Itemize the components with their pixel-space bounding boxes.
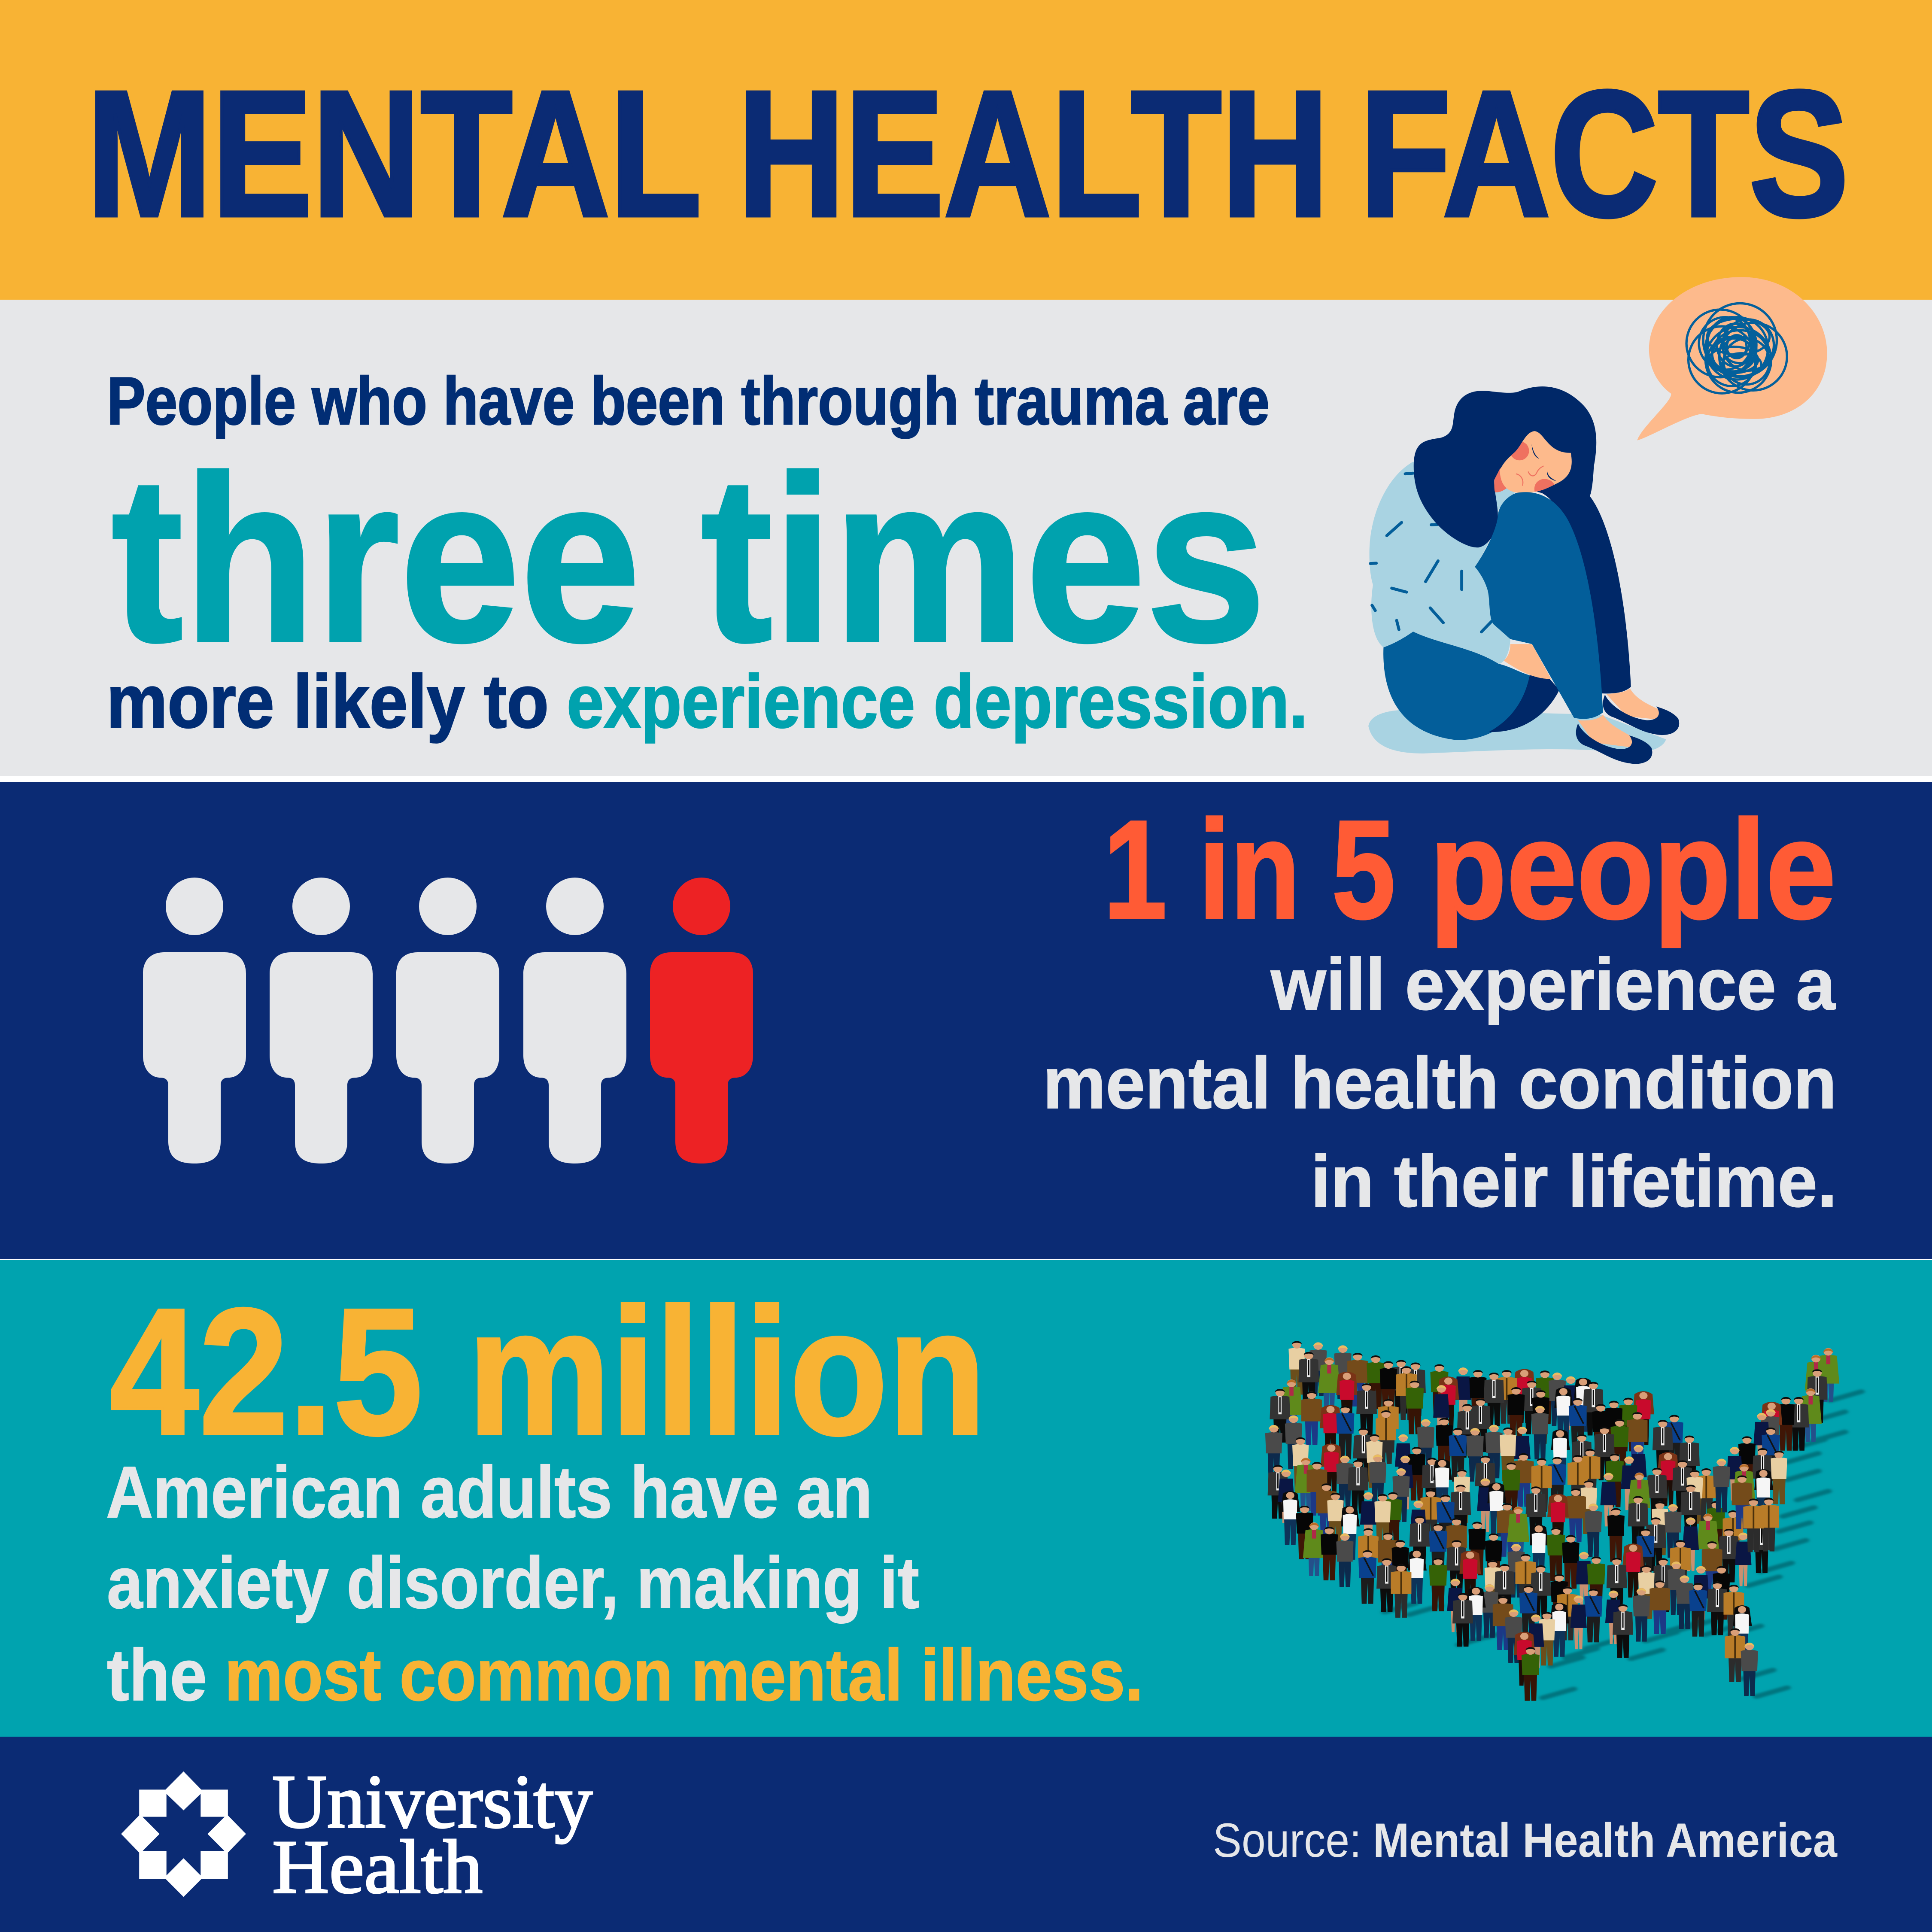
front foot [1576, 715, 1652, 764]
near leg [1475, 492, 1603, 719]
text: the: the [107, 1634, 207, 1716]
text: 42.5 million: 42.5 million [109, 1271, 986, 1473]
back foot [1603, 688, 1679, 735]
text: source label: Source: [1213, 1814, 1361, 1867]
face [1494, 431, 1572, 493]
text: more likely to: more likely to [106, 660, 549, 744]
sweater pattern [1370, 473, 1492, 632]
panel: trauma and depression [0, 300, 1932, 776]
logo: University Health star mark [121, 1771, 246, 1897]
panel: 1 in 5 people [0, 782, 1932, 1259]
title: MENTAL [87, 54, 702, 254]
panel: 42.5 million [0, 1260, 1932, 1737]
illustration: crowd forming a map of the USA [1265, 1341, 1861, 1701]
far arm [1538, 489, 1631, 693]
logo: University wordmark: University [272, 1759, 592, 1844]
text: in their lifetime: in their lifetime. [1311, 1141, 1837, 1222]
hair [1414, 386, 1596, 547]
illustration: sad woman with speech bubble [1368, 277, 1827, 764]
text: people: people [1430, 792, 1836, 948]
title [87, 54, 1849, 254]
text: three times: three times [111, 427, 1266, 691]
text: mental health condition: mental health condition [1043, 1042, 1837, 1124]
text: will experience a: will experience a [1270, 944, 1836, 1025]
text: experience depression: experience depression. [567, 660, 1308, 744]
hand [1504, 644, 1551, 679]
panel: header band [0, 0, 1932, 300]
text: most common mental illness: most common mental illness. [225, 1634, 1143, 1716]
floor shadow [1368, 710, 1666, 753]
logo: Health wordmark: Health [272, 1824, 483, 1909]
text: intro line: People who have been through trauma are [107, 364, 1270, 439]
title: HEALTH [738, 54, 1329, 254]
text: source name: Mental Health America [1373, 1814, 1838, 1867]
seat and thigh [1383, 632, 1530, 740]
speech bubble with scribble [1637, 277, 1827, 440]
text: anxiety disorder: anxiety disorder, making it [107, 1542, 919, 1624]
text: 1 in 5: 1 in 5 [1103, 792, 1395, 948]
panel: footer [0, 1737, 1932, 1932]
crowd shadows [1385, 1391, 1861, 1698]
title: FACTS [1360, 54, 1849, 254]
pictogram: five people, one highlighted [143, 878, 753, 1163]
sweater [1369, 462, 1515, 664]
text: American adults have an: American adults have an [106, 1452, 872, 1533]
under leg [1488, 675, 1559, 732]
